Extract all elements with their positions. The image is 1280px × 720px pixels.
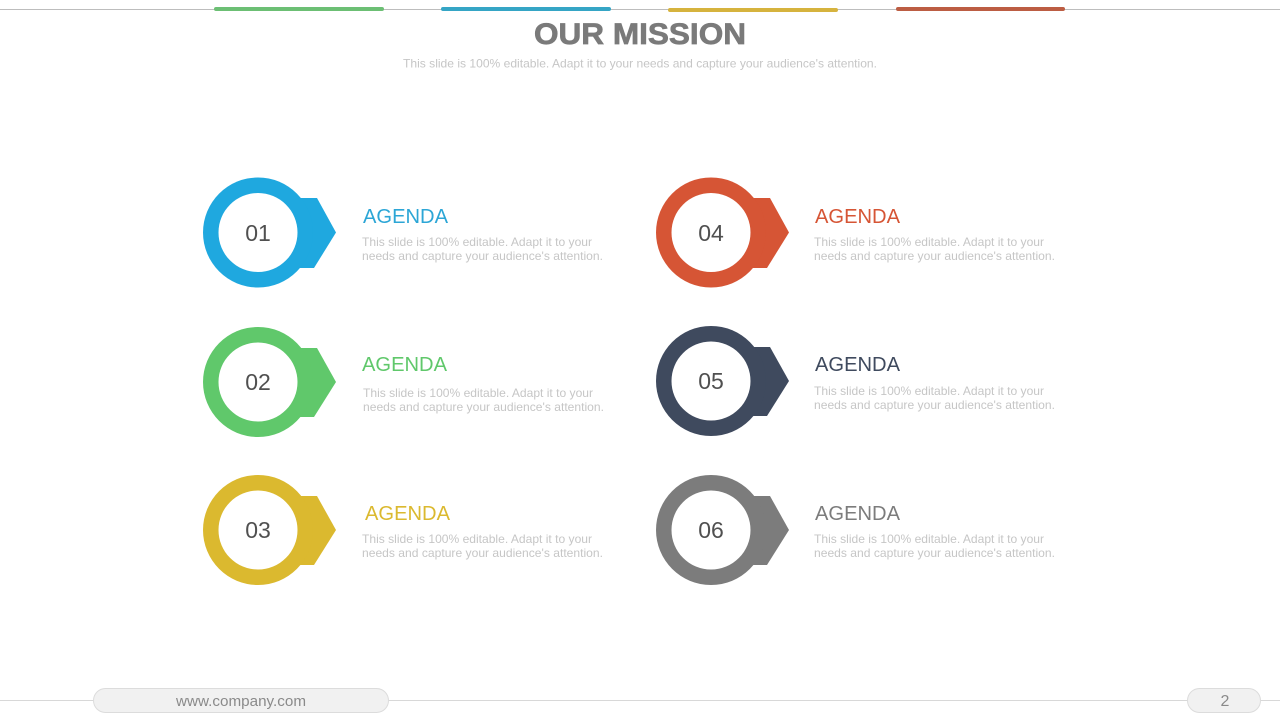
text: agenda 03 description: needs and capture your audience's attention. bbox=[362, 546, 603, 560]
text: agenda 04 description: needs and capture your audience's attention. bbox=[814, 249, 1055, 263]
footer: page number pill bbox=[1188, 688, 1260, 712]
text: agenda 03 description bbox=[362, 532, 603, 560]
subtitle: This slide is 100% editable. Adapt it to your needs and capture your audience's attention. bbox=[403, 56, 877, 70]
text: agenda 02 description: needs and capture your audience's attention. bbox=[363, 400, 604, 414]
heading: agenda 01: AGENDA bbox=[363, 206, 449, 228]
text: agenda 01 description bbox=[362, 235, 603, 263]
heading: agenda 02: AGENDA bbox=[362, 354, 448, 376]
icon: green numbered circle 02: 02 bbox=[245, 369, 271, 395]
agenda item 04 bbox=[656, 178, 1055, 288]
text: agenda 01 description: needs and capture your audience's attention. bbox=[362, 249, 603, 263]
agenda item 05 bbox=[656, 326, 1055, 436]
title: OUR MISSION bbox=[534, 18, 746, 51]
icon: navy numbered circle 05: 05 bbox=[698, 368, 724, 394]
agenda item 06 bbox=[656, 475, 1055, 585]
heading: agenda 03: AGENDA bbox=[365, 503, 451, 525]
heading: agenda 04: AGENDA bbox=[815, 206, 901, 228]
text: agenda 04 description: This slide is 100% editable. Adapt it to your bbox=[814, 235, 1044, 249]
icon: blue numbered circle 01 bbox=[203, 178, 336, 288]
agenda item 02 bbox=[203, 327, 604, 437]
footer: website pill: www.company.com bbox=[175, 693, 306, 710]
text: agenda 06 description bbox=[814, 532, 1055, 560]
icon: blue numbered circle 01: 01 bbox=[245, 220, 271, 246]
icon: green numbered circle 02 bbox=[203, 327, 336, 437]
text: agenda 02 description bbox=[363, 386, 604, 414]
text: agenda 01 description: This slide is 100% editable. Adapt it to your bbox=[362, 235, 592, 249]
footer: website pill bbox=[94, 688, 388, 712]
top accent bars bbox=[214, 7, 1065, 12]
icon: yellow numbered circle 03: 03 bbox=[245, 517, 271, 543]
icon: orange numbered circle 04: 04 bbox=[698, 220, 724, 246]
text: agenda 05 description: needs and capture your audience's attention. bbox=[814, 398, 1055, 412]
text: agenda 02 description: This slide is 100% editable. Adapt it to your bbox=[363, 386, 593, 400]
icon: orange numbered circle 04 bbox=[656, 178, 789, 288]
text: agenda 06 description: This slide is 100% editable. Adapt it to your bbox=[814, 532, 1044, 546]
text: agenda 03 description: This slide is 100% editable. Adapt it to your bbox=[362, 532, 592, 546]
heading: agenda 05: AGENDA bbox=[815, 354, 901, 376]
icon: grey numbered circle 06: 06 bbox=[698, 517, 724, 543]
agenda item 03 bbox=[203, 475, 603, 585]
text: agenda 05 description bbox=[814, 384, 1055, 412]
text: agenda 05 description: This slide is 100% editable. Adapt it to your bbox=[814, 384, 1044, 398]
text: agenda 04 description bbox=[814, 235, 1055, 263]
icon: yellow numbered circle 03 bbox=[203, 475, 336, 585]
icon: navy numbered circle 05 bbox=[656, 326, 789, 436]
heading: agenda 06: AGENDA bbox=[815, 503, 901, 525]
agenda item 01 bbox=[203, 178, 603, 288]
footer: page number pill: 2 bbox=[1221, 693, 1230, 710]
icon: grey numbered circle 06 bbox=[656, 475, 789, 585]
text: agenda 06 description: needs and capture your audience's attention. bbox=[814, 546, 1055, 560]
